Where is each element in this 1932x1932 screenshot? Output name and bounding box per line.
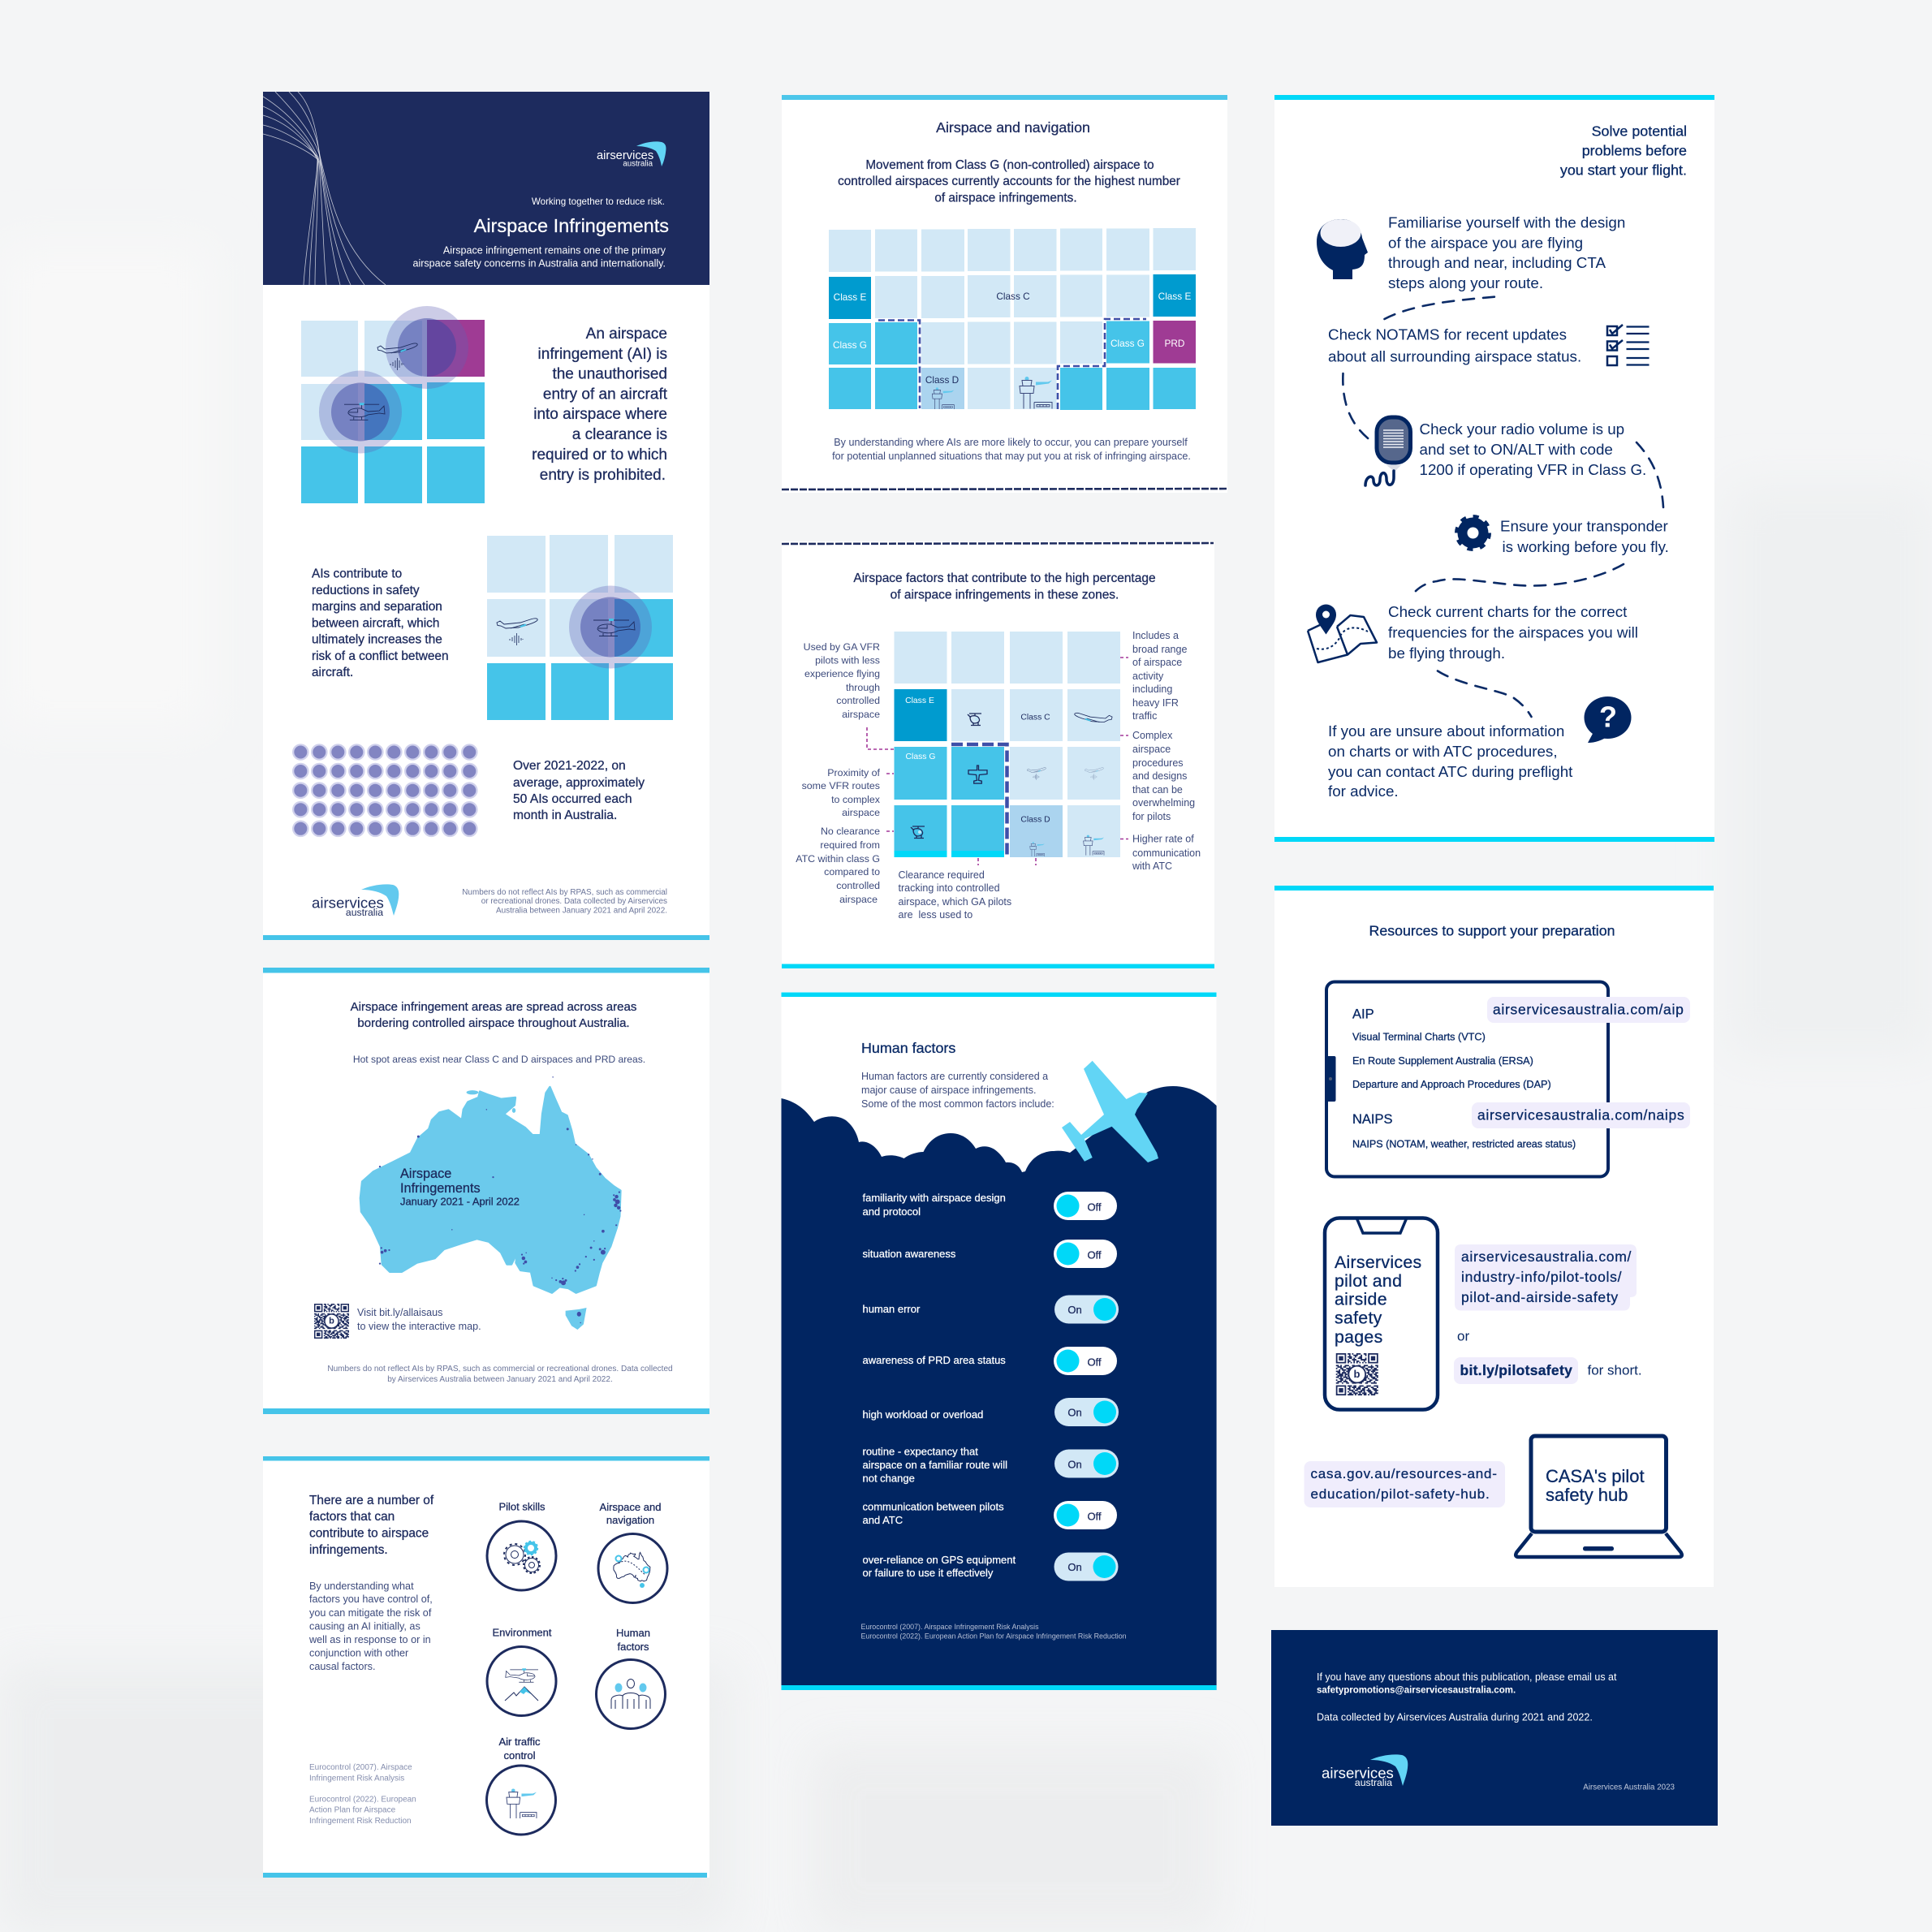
- stat text: average, approximately: [513, 776, 645, 789]
- logo: airservices australia: airservices: [1322, 1765, 1394, 1781]
- references: Infringement Risk Reduction: [309, 1817, 412, 1825]
- bottom bar: [263, 1873, 707, 1878]
- left annotation: proximity: some VFR routes: [802, 780, 880, 791]
- left annotation: proximity: airspace: [842, 807, 880, 818]
- title: Human factors: [861, 1040, 955, 1056]
- icon: transponder gear: [1456, 516, 1489, 549]
- references: Eurocontrol (2007). Airspace: [309, 1763, 412, 1771]
- logo: airservices australia: [597, 141, 666, 169]
- step 6: you can contact ATC during preflight: [1328, 763, 1573, 779]
- references: Action Plan for Airspace: [309, 1805, 396, 1814]
- bottom annotation: clearance: airspace, which GA pilots: [898, 896, 1011, 908]
- link: short url: bit.ly/pilotsafety: [1460, 1362, 1572, 1378]
- logo: airservices australia: australia: [1355, 1777, 1392, 1788]
- factor 7: [862, 1500, 1117, 1529]
- heading: problems before: [1582, 143, 1687, 159]
- factor: airspace and navigation: Airspace and: [600, 1500, 661, 1513]
- description: Movement from Class G (non-controlled) airspace to: [865, 157, 1154, 172]
- link: pilot tools: [1455, 1244, 1637, 1310]
- step 1: of the airspace you are flying: [1388, 234, 1583, 251]
- logo: airservices australia: australia: [623, 159, 653, 169]
- icon: head: [1317, 219, 1368, 279]
- left annotation: GA VFR: pilots with less: [815, 654, 880, 666]
- right annotation: broad range: including: [1132, 684, 1172, 695]
- heading: contribute to airspace: [309, 1526, 429, 1540]
- icon: plane silhouette: [1062, 1061, 1158, 1162]
- step 1: Familiarise yourself with the design: [1388, 213, 1625, 231]
- AIs text: AIs contribute to: [312, 567, 402, 580]
- factor 3: On: [1067, 1304, 1082, 1316]
- factor 8: On: [1067, 1561, 1082, 1573]
- factor 8: over-reliance on GPS equipment: [862, 1554, 1016, 1565]
- map date range: January 2021 - April 2022: [400, 1195, 520, 1208]
- heading: Solve potential: [1592, 123, 1687, 140]
- footnote: by Airservices Australia between January 2021 and April 2022.: [387, 1375, 613, 1383]
- factor: environment: [487, 1627, 556, 1716]
- map label: Infringements: [400, 1181, 481, 1196]
- logo: airservices australia: [1322, 1754, 1408, 1788]
- top bar: [782, 95, 1227, 100]
- diagram: grid with conflict circle: [487, 535, 673, 720]
- panel: solve potential problems: [1274, 95, 1714, 842]
- factor list with toggles: [862, 1192, 1119, 1581]
- left annotation: no clearance: No clearance: [821, 826, 880, 837]
- map link text: Visit bit.ly/allaisaus: [357, 1307, 442, 1318]
- clouds and navy area: [781, 1086, 1217, 1690]
- phone with pilot and airside safety: b: [1354, 1368, 1361, 1380]
- bottom annotation: clearance: tracking into controlled: [898, 882, 1000, 894]
- left annotation: no clearance: required from: [820, 839, 880, 851]
- tablet with AIP and NAIPS: Departure and Approach Procedures (DAP): [1352, 1079, 1551, 1090]
- link: short url: [1454, 1357, 1578, 1384]
- step 2: Check NOTAMS for recent updates: [1328, 326, 1567, 343]
- phone with pilot and airside safety: Airservices: [1335, 1253, 1421, 1272]
- left annotation: proximity: to complex: [831, 794, 881, 805]
- AIs text: margins and separation: [312, 599, 442, 614]
- right annotation: complex airspace: airspace: [1132, 744, 1171, 755]
- factor 5: high workload or overload: [862, 1408, 983, 1421]
- zone labels: [905, 696, 1050, 825]
- panel: airspace and navigation: [782, 95, 1227, 493]
- right annotation: broad range: of airspace: [1132, 657, 1182, 668]
- definition text: infringement (AI) is: [538, 346, 667, 362]
- explanation: for potential unplanned situations that may put you at risk of infringing airspace.: [832, 451, 1191, 462]
- references: Eurocontrol (2022). European: [309, 1795, 416, 1804]
- AIs text: between aircraft, which: [312, 616, 439, 630]
- right annotation: complex airspace: overwhelming: [1132, 797, 1195, 809]
- zone labels: Class C: [1020, 713, 1050, 722]
- definition text: entry is prohibited.: [540, 466, 666, 484]
- intro: Human factors are currently considered a: [861, 1071, 1048, 1082]
- body text: conjunction with other: [309, 1648, 408, 1659]
- QR code: [314, 1304, 349, 1339]
- intro: major cause of airspace infringements.: [861, 1085, 1036, 1096]
- class labels: PRD: [1165, 338, 1184, 349]
- link: NAIPS: [1472, 1102, 1690, 1128]
- top bar: [1274, 95, 1714, 100]
- panel: contact footer: [1271, 1630, 1718, 1826]
- factor: airspace and navigation: navigation: [606, 1513, 654, 1526]
- factor: pilot skills: [487, 1500, 556, 1590]
- bottom bar: [263, 1408, 709, 1414]
- right annotation: broad range: heavy IFR: [1132, 697, 1179, 709]
- right annotation: ATC: Higher rate of: [1132, 833, 1194, 844]
- text: for short: for short.: [1588, 1362, 1642, 1378]
- right annotation: complex airspace: for pilots: [1132, 811, 1171, 822]
- factor 5: [862, 1398, 1119, 1426]
- definition text: required or to which: [532, 446, 667, 463]
- heading: Resources to support your preparation: [1369, 922, 1615, 938]
- AIs text: risk of a conflict between: [312, 649, 449, 662]
- factor: human factors: Human: [616, 1627, 650, 1638]
- email: safetypromotions@airservicesaustralia.com.: [1317, 1685, 1516, 1695]
- title: Airspace factors that contribute to the high percentage: [853, 571, 1156, 584]
- class labels: Class G: [1110, 338, 1145, 349]
- tagline: Working together to reduce risk.: [532, 196, 665, 207]
- class labels: Class G: [833, 339, 867, 351]
- factor: environment: Environment: [493, 1627, 552, 1638]
- laptop with CASA pilot safety hub: CASA's pilot: [1546, 1466, 1645, 1486]
- bottom annotation: clearance: are less used to: [898, 909, 972, 921]
- step 2: about all surrounding airspace status.: [1328, 347, 1581, 364]
- QR code: b: [329, 1317, 334, 1326]
- factor 2: Off: [1087, 1248, 1102, 1261]
- panel: airspace infringements intro: [263, 92, 709, 940]
- left annotation: GA VFR: airspace: [842, 709, 880, 720]
- factor: airspace and navigation: [598, 1500, 667, 1602]
- AIP list: AIP: [1352, 1007, 1374, 1021]
- factor 8: [862, 1552, 1119, 1581]
- diagram: airspace grid with aircraft: [301, 306, 485, 503]
- intro text: Airspace infringement remains one of the primary: [443, 245, 666, 257]
- footnote: Australia between January 2021 and April 2022.: [496, 906, 667, 915]
- factor: air traffic control: Air traffic: [498, 1736, 541, 1747]
- title: Airspace and navigation: [936, 119, 1090, 136]
- link: pilot tools: industry-info/pilot-tools/: [1461, 1269, 1622, 1285]
- top bar: [781, 992, 1216, 997]
- heading: you start your flight.: [1560, 162, 1687, 179]
- class labels: Class D: [925, 374, 959, 386]
- factor: pilot skills: Pilot skills: [498, 1500, 546, 1513]
- stat text: 50 AIs occurred each: [513, 792, 632, 805]
- panel: contributing factors: [263, 1456, 709, 1878]
- step 4: is working before you fly.: [1502, 537, 1669, 555]
- top bar: [1274, 886, 1714, 891]
- diagram: airspace zones grid: [867, 632, 1128, 865]
- right annotation: complex airspace: procedures: [1132, 757, 1184, 769]
- contact text: If you have any questions about this publication, please email us at: [1317, 1671, 1617, 1683]
- definition text: the unauthorised: [552, 365, 667, 382]
- panel: map of infringement areas: [263, 968, 709, 1414]
- factor 1: Off: [1087, 1201, 1102, 1213]
- heading: infringements.: [309, 1542, 388, 1557]
- step 6: for advice.: [1328, 783, 1399, 799]
- factor: human factors: factors: [617, 1640, 649, 1653]
- aircraft icons: [911, 713, 1112, 856]
- factor 7: and ATC: [862, 1513, 903, 1526]
- panel: airspace factors: [782, 541, 1214, 968]
- logo: airservices australia: airservices: [597, 149, 653, 162]
- class labels: [833, 291, 1191, 386]
- phone with pilot and airside safety: pilot and: [1335, 1271, 1402, 1291]
- bottom bar: [1274, 837, 1714, 842]
- factor 2: [862, 1240, 1117, 1268]
- body text: causal factors.: [309, 1661, 375, 1672]
- route arrow 2: [1343, 373, 1369, 440]
- references: Infringement Risk Analysis: [309, 1774, 404, 1783]
- references: Eurocontrol (2022). European Action Plan for Airspace Infringement Risk Reduction: [860, 1632, 1127, 1640]
- step 5: be flying through.: [1388, 645, 1505, 661]
- subheading: Hot spot areas exist near Class C and D airspaces and PRD areas.: [353, 1054, 645, 1065]
- intro text: airspace safety concerns in Australia and internationally.: [412, 258, 666, 270]
- phone with pilot and airside safety: [1325, 1218, 1438, 1409]
- right annotation: ATC: communication: [1132, 847, 1201, 859]
- left annotation: no clearance: compared to: [824, 866, 880, 878]
- text: or: or: [1457, 1328, 1469, 1344]
- class labels: Class C: [996, 291, 1030, 302]
- description: controlled airspaces currently accounts for the highest number: [838, 174, 1180, 188]
- factor 8: or failure to use it effectively: [862, 1567, 994, 1578]
- right annotation: broad range: broad range: [1132, 644, 1187, 655]
- class labels: Class E: [1158, 291, 1191, 302]
- stat text: Over 2021-2022, on: [513, 758, 626, 773]
- factor 4: awareness of PRD area status: [862, 1354, 1006, 1366]
- dashed top edge: [782, 543, 1214, 544]
- icon: radio: [1365, 417, 1411, 485]
- right annotation: broad range: traffic: [1132, 710, 1157, 722]
- step 3: and set to ON/ALT with code: [1419, 440, 1613, 458]
- description: of airspace infringements.: [934, 191, 1077, 205]
- factor 6: [862, 1445, 1119, 1484]
- factor 6: not change: [862, 1472, 915, 1484]
- factor 1: familiarity with airspace design: [862, 1192, 1006, 1203]
- explanation: By understanding where AIs are more likely to occur, you can prepare yourself: [834, 437, 1188, 448]
- link: AIP: [1487, 997, 1690, 1023]
- left annotation: no clearance: airspace: [839, 894, 878, 905]
- left annotation: GA VFR: controlled: [836, 695, 880, 706]
- factor: human factors: [596, 1627, 666, 1729]
- footnote: Numbers do not reflect AIs by RPAS, such as commercial: [462, 888, 667, 896]
- logo: airservices australia: [312, 884, 399, 918]
- factor 6: On: [1067, 1458, 1082, 1471]
- map of Australia: [360, 1076, 621, 1330]
- zone labels: Class G: [906, 753, 935, 761]
- factor 7: Off: [1087, 1510, 1102, 1523]
- map label: Airspace: [400, 1167, 451, 1181]
- definition text: An airspace: [586, 325, 667, 343]
- data note: Data collected by Airservices Australia during 2021 and 2022.: [1317, 1711, 1593, 1723]
- tablet with AIP and NAIPS: NAIPS (NOTAM, weather, restricted areas status): [1352, 1138, 1576, 1149]
- footnote: Numbers do not reflect AIs by RPAS, such as commercial or recreational drones. Data collected: [327, 1364, 673, 1374]
- dashed boundary: [878, 319, 1146, 409]
- AIs text: ultimately increases the: [312, 632, 442, 646]
- zone labels: Class E: [905, 696, 934, 705]
- body text: factors you have control of,: [309, 1593, 433, 1605]
- NAIPS list: NAIPS: [1352, 1112, 1393, 1127]
- left annotation: GA VFR: Used by GA VFR: [804, 641, 880, 653]
- tablet with AIP and NAIPS: Visual Terminal Charts (VTC): [1352, 1031, 1486, 1042]
- left annotation: GA VFR: experience flying: [804, 668, 880, 679]
- leader lines: [867, 658, 1128, 865]
- right annotation: complex airspace: and designs: [1132, 770, 1187, 782]
- link: CASA: education/pilot-safety-hub.: [1310, 1486, 1490, 1502]
- heading: Airspace infringement areas are spread across areas: [351, 1000, 636, 1013]
- bottom bar: [781, 1685, 1216, 1690]
- title: of airspace infringements in these zones.: [891, 588, 1119, 602]
- route arrow 5: [1438, 671, 1531, 717]
- laptop with CASA pilot safety hub: safety hub: [1546, 1484, 1628, 1505]
- definition text: entry of an aircraft: [543, 386, 668, 403]
- bottom bar: [782, 964, 1214, 968]
- top bar: [263, 1456, 709, 1461]
- definition text: a clearance is: [572, 425, 667, 443]
- step 6: on charts or with ATC procedures,: [1328, 742, 1558, 760]
- factor: air traffic control: control: [503, 1749, 536, 1762]
- icon: map with pin: [1308, 604, 1377, 662]
- tablet with AIP and NAIPS: [1326, 982, 1608, 1177]
- factor 7: communication between pilots: [862, 1500, 1004, 1512]
- factor: air traffic control: [487, 1736, 555, 1835]
- decorative flight curves: [263, 92, 386, 285]
- step 3: 1200 if operating VFR in Class G.: [1419, 461, 1646, 477]
- body text: By understanding what: [309, 1581, 414, 1592]
- step 5: Check current charts for the correct: [1388, 602, 1628, 620]
- zone labels: Class D: [1020, 815, 1050, 825]
- AIs text: aircraft.: [312, 666, 353, 679]
- factor 3: human error: [862, 1303, 921, 1315]
- phone with pilot and airside safety: airside: [1335, 1289, 1387, 1309]
- left annotation: proximity: Proximity of: [827, 767, 881, 778]
- chart: 50 dots per month: [292, 744, 478, 837]
- icon: question bubble: [1585, 696, 1632, 743]
- map link text: to view the interactive map.: [357, 1321, 481, 1332]
- laptop with CASA pilot safety hub: [1516, 1436, 1682, 1557]
- heading: factors that can: [309, 1510, 395, 1523]
- body text: you can mitigate the risk of: [309, 1607, 432, 1619]
- factor 5: On: [1067, 1406, 1082, 1419]
- phone with pilot and airside safety: pages: [1335, 1327, 1383, 1347]
- link: AIP: airservicesaustralia.com/aip: [1493, 1002, 1684, 1018]
- step 4: Ensure your transponder: [1500, 517, 1668, 534]
- route arrow 1: [1385, 297, 1497, 319]
- link: CASA: [1304, 1461, 1505, 1507]
- factor 2: situation awareness: [862, 1248, 956, 1260]
- dashed boundary: [951, 744, 1007, 857]
- heading: There are a number of: [309, 1494, 434, 1507]
- panel: human factors: [781, 992, 1217, 1690]
- bottom annotation: clearance: Clearance required: [898, 869, 985, 881]
- factor 1: [862, 1192, 1117, 1220]
- header banner: [263, 92, 709, 285]
- right annotation: complex airspace: that can be: [1132, 784, 1183, 796]
- top bar: [263, 968, 709, 972]
- right annotation: ATC: with ATC: [1132, 860, 1172, 872]
- intro: Some of the most common factors include:: [861, 1098, 1054, 1110]
- panel: resources: [1274, 886, 1714, 1587]
- left annotation: no clearance: ATC within class G: [796, 853, 880, 865]
- step 3: Check your radio volume is up: [1419, 420, 1624, 437]
- stat text: month in Australia.: [513, 809, 617, 822]
- logo: airservices australia: australia: [346, 907, 383, 918]
- factor 6: routine - expectancy that: [862, 1445, 978, 1457]
- references: Eurocontrol (2007). Airspace Infringement Risk Analysis: [860, 1623, 1039, 1631]
- link: NAIPS: airservicesaustralia.com/naips: [1477, 1107, 1684, 1123]
- definition text: into airspace where: [533, 406, 667, 422]
- left annotation: GA VFR: through: [846, 682, 880, 693]
- icon: question bubble: ?: [1599, 700, 1617, 734]
- class labels: Class E: [834, 291, 866, 303]
- link: pilot tools: pilot-and-airside-safety: [1461, 1289, 1619, 1305]
- footnote: or recreational drones. Data collected by Airservices: [481, 896, 667, 906]
- heading: bordering controlled airspace throughout Australia.: [357, 1016, 630, 1029]
- logo: airservices australia: airservices: [312, 895, 384, 911]
- copyright: Airservices Australia 2023: [1583, 1783, 1675, 1792]
- link: CASA: casa.gov.au/resources-and-: [1310, 1466, 1498, 1481]
- infringement hot spots: [379, 1076, 621, 1323]
- step 1: through and near, including CTA: [1388, 253, 1606, 271]
- route arrow 4: [1412, 564, 1624, 594]
- icon: checklist: [1607, 325, 1650, 365]
- factor 4: Off: [1087, 1356, 1102, 1369]
- left annotation: no clearance: controlled: [836, 880, 880, 891]
- phone with pilot and airside safety: safety: [1335, 1309, 1382, 1328]
- bottom bar: [263, 935, 709, 940]
- factor 1: and protocol: [862, 1205, 921, 1218]
- right annotation: complex airspace: Complex: [1132, 730, 1173, 741]
- body text: well as in response to or in: [308, 1634, 431, 1645]
- diagram: airspace class grid: [829, 228, 1196, 410]
- factor 6: airspace on a familiar route will: [862, 1458, 1007, 1471]
- right annotation: broad range: Includes a: [1132, 630, 1179, 641]
- factor 4: [862, 1347, 1117, 1375]
- factor 3: [862, 1296, 1119, 1323]
- step 5: frequencies for the airspaces you will: [1388, 623, 1638, 640]
- link: pilot tools: airservicesaustralia.com/: [1461, 1248, 1632, 1265]
- tablet with AIP and NAIPS: En Route Supplement Australia (ERSA): [1352, 1055, 1533, 1067]
- step 6: If you are unsure about information: [1328, 722, 1564, 739]
- step 1: steps along your route.: [1388, 274, 1543, 291]
- AIs text: reductions in safety: [312, 583, 420, 597]
- body text: causing an AI initially, as: [309, 1620, 420, 1632]
- right annotation: broad range: activity: [1132, 671, 1164, 682]
- title: Airspace Infringements: [474, 215, 669, 236]
- route arrow 3: [1637, 442, 1663, 507]
